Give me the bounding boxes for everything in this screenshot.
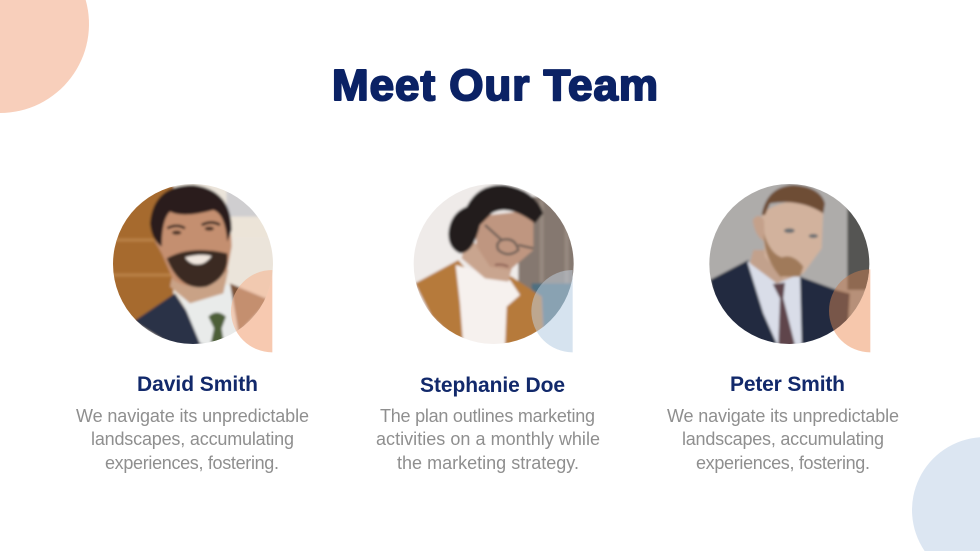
description: Peter Smith: We navigate its unpredictable bbox=[667, 406, 899, 426]
description: Peter Smith bbox=[667, 406, 899, 473]
description: Peter Smith: experiences, fostering. bbox=[696, 453, 870, 473]
name: Peter Smith: Peter Smith bbox=[730, 373, 845, 396]
portrait: Peter Smith bbox=[703, 180, 877, 352]
portrait: David Smith bbox=[110, 180, 277, 352]
team member: Peter Smith bbox=[667, 180, 899, 473]
description: David Smith bbox=[76, 406, 309, 473]
description: David Smith: experiences, fostering. bbox=[105, 453, 279, 473]
title: Meet Our Team bbox=[332, 61, 658, 110]
description: Stephanie Doe: the marketing strategy. bbox=[397, 453, 579, 473]
description: Stephanie Doe: activities on a monthly while bbox=[376, 429, 600, 449]
decorative blue corner circle bbox=[912, 437, 980, 551]
description: Peter Smith: landscapes, accumulating bbox=[682, 429, 884, 449]
team member: Stephanie Doe bbox=[376, 180, 600, 473]
description: David Smith: We navigate its unpredictable bbox=[76, 406, 309, 426]
decorative peach corner circle bbox=[0, 0, 89, 113]
team member: David Smith bbox=[76, 180, 309, 473]
description: Stephanie Doe bbox=[376, 406, 600, 473]
description: David Smith: landscapes, accumulating bbox=[91, 429, 294, 449]
description: Stephanie Doe: The plan outlines marketing bbox=[380, 406, 595, 426]
overlap tint bbox=[231, 270, 272, 331]
portrait: Stephanie Doe bbox=[408, 180, 578, 352]
overlap tint bbox=[829, 270, 869, 330]
overlap tint bbox=[531, 270, 573, 332]
name: David Smith: David Smith bbox=[137, 373, 258, 396]
name: Stephanie Doe: Stephanie Doe bbox=[420, 374, 565, 397]
